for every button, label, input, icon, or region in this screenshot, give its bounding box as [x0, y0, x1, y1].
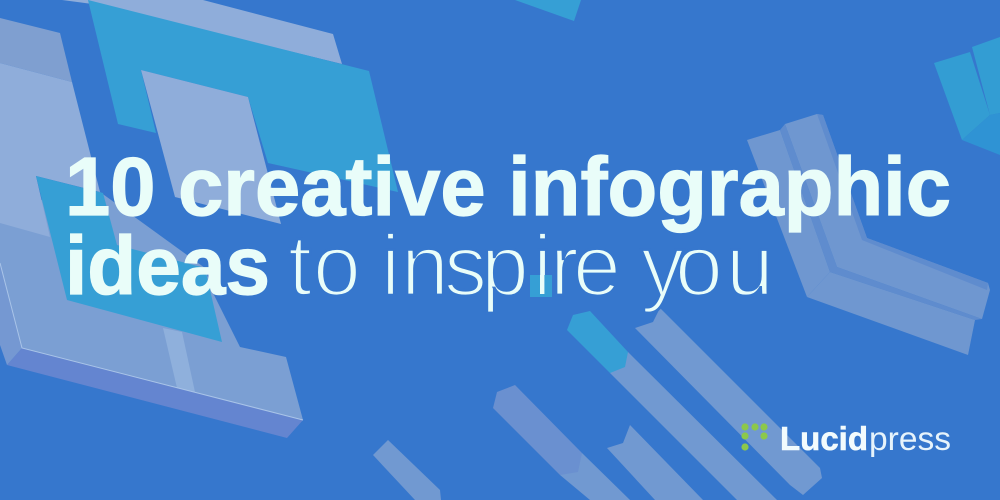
shape: cyan face left	[934, 52, 990, 140]
shape: small cyan square	[530, 275, 552, 297]
shape: upper back block	[0, 18, 72, 82]
shape: cyan block	[88, 0, 398, 192]
shape: block edge highlight	[0, 263, 303, 420]
shape: left face	[0, 263, 22, 365]
shape: back chevron	[785, 114, 990, 319]
shape: lower-left strip	[373, 440, 441, 500]
shape: front chevron upright	[747, 130, 830, 297]
title line 2 light: to inspire you	[288, 218, 774, 314]
shape: light strip	[163, 328, 195, 392]
panel: top-right cyan block	[934, 37, 1000, 155]
shape: top cyan fragment	[515, 0, 581, 21]
panel: bottom diagonal strips	[373, 308, 822, 500]
logo wordmark regular: press	[869, 420, 951, 457]
panel: left isometric blocks	[0, 18, 303, 438]
shape: right strip	[635, 308, 822, 495]
shape: chevron gap shadow	[780, 124, 982, 320]
shape: light inner block	[141, 70, 281, 224]
shape: cyan lower facet	[962, 113, 1000, 155]
shape: long strip	[610, 352, 777, 500]
logo: Lucidpress	[741, 420, 951, 457]
shape: middle strip lower	[560, 453, 630, 500]
shape: lower large block	[0, 190, 303, 420]
shape: top light band	[62, 0, 342, 64]
shape: light block	[0, 63, 100, 237]
icon: green dots	[741, 423, 768, 451]
shape: bottom face	[7, 348, 303, 438]
shape: cyan hexagon	[567, 311, 628, 373]
shape: middle strip hexagon	[493, 385, 582, 475]
title	[65, 140, 951, 314]
shape: back chevron shadow edge	[817, 114, 988, 290]
shape: small arrow strip	[607, 425, 703, 500]
title line 2 bold: ideas	[65, 219, 270, 312]
shape: cyan block lower	[36, 176, 222, 342]
title line 1: 10 creative infographic	[65, 140, 951, 233]
logo wordmark bold: Lucid	[780, 420, 868, 457]
shape: cyan face right	[972, 37, 1000, 115]
panel: right chevron	[747, 114, 990, 355]
shape: front chevron arm	[807, 272, 975, 355]
panel: top-left isometric blocks	[62, 0, 398, 224]
